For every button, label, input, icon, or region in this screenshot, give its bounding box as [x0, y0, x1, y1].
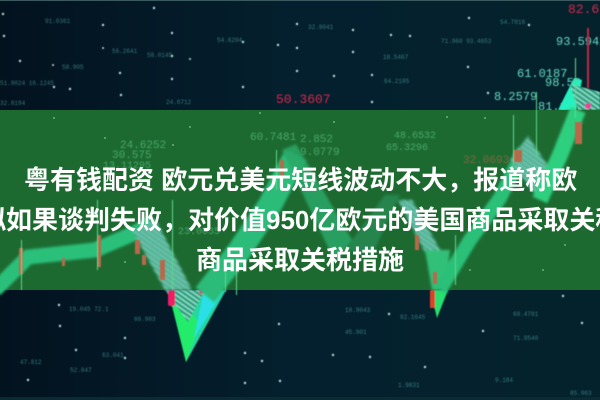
small ticker numbers: 56.2641: [112, 48, 138, 55]
green band numbers: 24.6252: [120, 140, 166, 152]
small ticker numbers: 1.9831: [398, 382, 420, 389]
small ticker numbers: 54.6204: [217, 37, 243, 44]
small ticker numbers: 47.812: [20, 359, 42, 366]
small ticker numbers: 18.5467: [383, 54, 409, 61]
large ticker numbers: 61.0187: [517, 67, 567, 81]
small ticker numbers: 9.184: [495, 377, 513, 384]
title line 1: 粤有钱配资 欧元兑美元短线波动不大，报道称欧: [24, 165, 577, 195]
red ticker numbers: [276, 2, 599, 107]
candlesticks: [19, 58, 582, 295]
small ticker numbers: 18.9043: [345, 307, 371, 314]
small ticker numbers: 54.7816: [500, 19, 526, 26]
small ticker numbers: 58.905: [62, 64, 84, 71]
large ticker numbers: [494, 35, 600, 114]
red ticker numbers: 50.3607: [276, 92, 331, 107]
green band numbers: 9.0779: [300, 147, 340, 159]
large ticker numbers: 98.52: [545, 76, 581, 90]
small ticker numbers: 85.963: [570, 390, 592, 397]
small ticker numbers: 86.903: [134, 316, 156, 323]
small ticker numbers: 52.847: [70, 367, 92, 374]
small ticker numbers: 32.9041: [308, 24, 334, 31]
green band numbers: 30.575: [112, 150, 152, 162]
small ticker numbers: 71.9540: [513, 335, 539, 342]
small ticker numbers: 51.9024 16.1245: [0, 80, 54, 87]
green band numbers: 48.6532: [394, 131, 436, 142]
overlay band colour: [0, 110, 600, 290]
large ticker numbers: 8.2579: [494, 90, 537, 104]
small ticker numbers: 64.2185: [384, 78, 410, 85]
red ticker numbers: 82.6: [568, 2, 599, 17]
green trend band: [0, 110, 578, 295]
small ticker numbers: 24.6712: [166, 99, 192, 106]
dark-area tail of trend: [165, 28, 600, 362]
green band numbers: 2.852: [300, 134, 333, 146]
green band numbers: 32.0693: [463, 155, 509, 167]
title line 3: 商品采取关税措施: [196, 245, 404, 275]
small ticker numbers: 58.0145: [147, 52, 173, 59]
small ticker numbers: 32.8194: [0, 100, 26, 107]
green band numbers: 65.3296: [386, 143, 428, 154]
small ticker numbers: 19.045 72.1: [69, 306, 109, 313]
small ticker numbers: 71.960 93.4653: [441, 38, 492, 45]
green band numbers: [103, 131, 509, 238]
green band numbers: 23.0035: [178, 227, 220, 238]
green band numbers: 13.11295: [103, 161, 151, 172]
small ticker numbers: 69.4781: [513, 311, 539, 318]
small ticker numbers: 91.0361: [45, 18, 71, 25]
small ticker numbers: 63.041: [102, 352, 124, 359]
green band numbers: 60.7481: [250, 132, 297, 144]
small ticker numbers: 82.1645: [400, 314, 426, 321]
small ticker numbers: 45.901: [345, 329, 367, 336]
large ticker numbers: 81.19: [538, 100, 574, 114]
dots on the green band: [53, 112, 566, 271]
